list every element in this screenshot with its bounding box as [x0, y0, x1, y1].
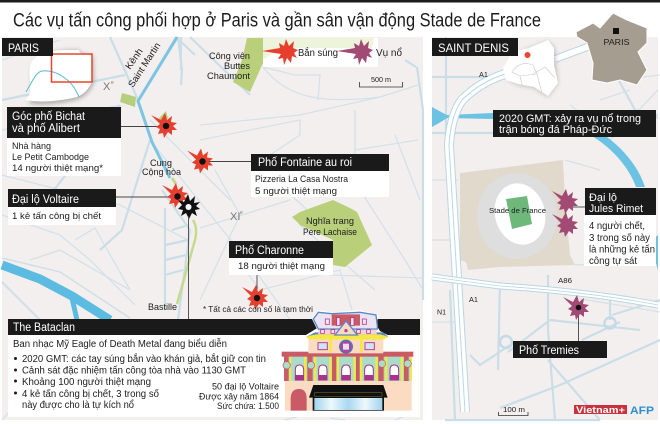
river — [432, 107, 658, 270]
logo: AFP: AFP — [630, 405, 654, 417]
panel: Paris map — [2, 37, 423, 420]
road labels: A1 — [469, 295, 478, 304]
callout: Phố Tremies — [513, 312, 607, 358]
motorway A86 — [432, 277, 658, 305]
scale bar 100 m — [498, 407, 528, 416]
callout: Góc phố Bichat: 14 người thiệt mạng* — [12, 163, 103, 174]
icon: explosion Tremies — [563, 295, 589, 320]
leader to Bataclan — [188, 216, 190, 319]
scale bar 500 m — [360, 77, 402, 87]
bullet list: này được cho là tự kích nổ — [22, 399, 134, 411]
venue details: 50 đại lộ Voltaire — [212, 382, 279, 392]
place labels: Pere Lachaise — [303, 227, 357, 238]
venue details — [199, 382, 279, 411]
stadium — [477, 173, 557, 259]
footnote: * Tất cả các con số là tạm thời — [203, 305, 313, 314]
callout: Phố Fontaine au roi: 5 người thiệt mạng — [255, 186, 337, 197]
icon: gunfire Fontaine — [187, 148, 213, 174]
Saint Denis streets — [432, 37, 660, 420]
callout: 2020 GMT: trận bóng đá Pháp-Đức — [499, 124, 612, 136]
panel: The Bataclan: The Bataclan — [13, 322, 75, 334]
callout: 2020 GMT — [493, 110, 656, 137]
callout: Phố Tremies: Phố Tremies — [519, 345, 579, 357]
bullet list: 4 kẻ tấn công bị chết, 3 trong số — [22, 388, 159, 400]
stadium: Stade de France — [489, 206, 546, 215]
place labels: Buttes — [224, 61, 250, 72]
callout: Đại lộ Voltaire — [8, 189, 174, 225]
heading: PARIS: PARIS — [8, 41, 39, 55]
scale bar 100 m: 100 m — [503, 407, 525, 414]
road labels: A1 — [479, 70, 488, 79]
bullet list: Cảnh sát đặc nhiệm tấn công tòa nhà vào 1130 GMT — [22, 364, 246, 376]
motorway A1 — [449, 46, 590, 412]
Seine — [2, 258, 130, 320]
venue details: Sức chứa: 1.500 — [217, 401, 279, 411]
callout: Phố Charonne — [229, 241, 333, 295]
legend: Bắn súng — [298, 46, 338, 59]
road labels — [437, 70, 572, 316]
callout: Đại lộ Voltaire: Đại lộ Voltaire — [12, 194, 79, 206]
place labels: XI — [230, 211, 240, 223]
stadium grounds — [460, 160, 575, 270]
bullet list: 2020 GMT: các tay súng bắn vào khán giả, bắt giữ con tin — [22, 352, 266, 365]
callout: Phố Fontaine au roi: Pizzeria La Casa Nostra — [255, 174, 349, 185]
icon: gunfire Bichat — [151, 113, 177, 138]
callout: Góc phố Bichat: Le Petit Cambodge — [12, 152, 89, 163]
icon: explosion Jules Rimet south — [552, 212, 578, 237]
place labels: Công viên — [209, 51, 250, 62]
panel: The Bataclan: Ban nhạc Mỹ Eagle of Death Metal đang biểu diễn — [13, 337, 227, 350]
scale bar 500 m: 500 m — [371, 77, 391, 84]
illustration: Bataclan building — [280, 310, 415, 411]
France locator: PARIS — [604, 37, 630, 47]
park: Pere Lachaise — [292, 200, 372, 267]
park: Buttes Chaumont — [233, 38, 263, 92]
callout: Đại lộ Voltaire: 1 kẻ tấn công bị chết — [12, 211, 101, 222]
icon: gunfire — [262, 39, 298, 65]
callout: Đại lộ Jules Rimet: 4 người chết, — [589, 220, 645, 232]
callout: Phố Fontaine au roi: Phố Fontaine au roi — [258, 157, 352, 169]
callout: Phố Charonne: Phố Charonne — [235, 245, 304, 257]
legend — [262, 38, 402, 67]
label: Canal: Kênh — [123, 47, 146, 72]
place labels — [103, 51, 357, 313]
callout: Góc phố Bichat: và phố Alibert — [12, 123, 81, 135]
place labels: Cộng hòa — [142, 167, 182, 178]
heading: PARIS — [2, 38, 53, 56]
icon: explosion — [337, 39, 373, 65]
bullet list — [14, 352, 266, 411]
road labels: N1 — [437, 308, 446, 316]
panel: The Bataclan — [8, 319, 420, 417]
Saint Denis locator inset — [503, 40, 558, 97]
top rule — [0, 0, 660, 2]
Canal Saint Martin — [138, 37, 177, 178]
road labels: A86 — [558, 276, 572, 285]
place labels: X — [103, 81, 111, 93]
icon: attacker killed — [178, 194, 200, 219]
logo: Vietnam+: Vietnam+ — [576, 405, 626, 416]
callout: Đại lộ Jules Rimet: công tự sát — [589, 256, 637, 267]
icon: gunfire Charonne — [242, 285, 268, 310]
callout: Phố Charonne: 18 người thiệt mạng — [238, 261, 325, 272]
icon: explosion Jules Rimet north — [552, 189, 578, 214]
callout: Góc phố Bichat — [7, 107, 162, 176]
heading: SAINT DENIS: SAINT DENIS — [438, 41, 509, 55]
title: Các vụ tấn công phối hợp ở Paris và gần sân vận động Stade de France — [13, 10, 541, 32]
callout: 2020 GMT: 2020 GMT: xảy ra vụ nổ trong — [499, 113, 641, 125]
place labels: Chaumont — [207, 71, 250, 82]
callout: Đại lộ Jules Rimet: Jules Rimet — [589, 203, 643, 215]
green squares — [120, 93, 196, 304]
Paris street network — [2, 37, 423, 420]
place labels: Nghĩa trang — [306, 216, 354, 227]
callout: Đại lộ Jules Rimet: 3 trong số này — [589, 232, 650, 244]
place labels: e — [240, 210, 243, 216]
Paris locator inset — [25, 50, 94, 104]
place labels: e — [111, 80, 114, 86]
place labels: Bastille — [148, 302, 177, 313]
callout: Đại lộ Jules Rimet — [572, 188, 656, 267]
venue details: Được xây năm 1864 — [199, 392, 279, 402]
callout: Đại lộ Jules Rimet: là những kẻ tấn — [589, 244, 655, 256]
legend: Vụ nổ — [376, 47, 402, 59]
panel: Saint Denis map — [432, 37, 660, 420]
label: Canal: Saint Martin — [126, 41, 163, 90]
place labels: Cung — [150, 158, 172, 169]
France locator — [576, 13, 647, 85]
bullet list: Khoảng 100 người thiệt mạng — [22, 377, 151, 388]
callout: Phố Fontaine au roi — [206, 154, 389, 197]
icon: gunfire Voltaire — [162, 183, 188, 208]
callout: Góc phố Bichat: Nhà hàng — [12, 141, 51, 152]
heading: SAINT DENIS — [432, 38, 518, 56]
callout: Đại lộ Jules Rimet: Đại lộ — [589, 192, 617, 204]
callout: Góc phố Bichat: Góc phố Bichat — [12, 111, 86, 123]
